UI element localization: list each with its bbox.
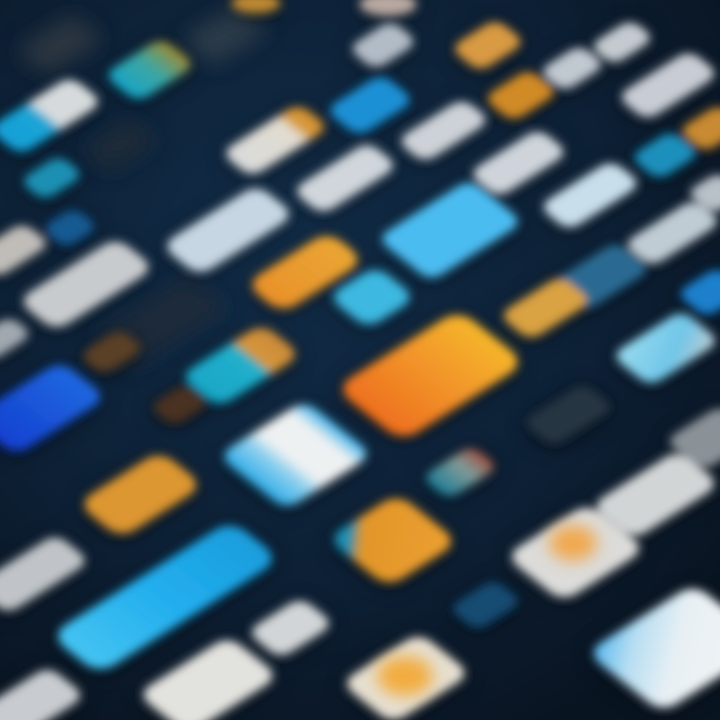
tile: orange upper [246, 232, 364, 312]
tile: cyan and orange [180, 324, 300, 406]
tile: orange small [499, 276, 592, 340]
spot: orange on white tile [549, 525, 597, 561]
tile: white top corner [590, 20, 654, 64]
tile: white with cyan edges [219, 401, 372, 509]
tile: sky and white [587, 584, 720, 712]
tile: white top right [539, 45, 605, 91]
tile: pale cyan bar [539, 160, 641, 230]
tile: white with orange bottom [342, 633, 470, 720]
tile: cyan and white [612, 311, 720, 385]
tile: white bar [397, 99, 490, 162]
tile: large orange [336, 310, 525, 441]
tile: dark gray [522, 383, 615, 447]
tile: white right [617, 50, 719, 120]
spot: orange bottom tile [377, 656, 433, 696]
tile: steel blue [551, 242, 651, 310]
tile: pale blue bar [162, 185, 294, 275]
tile: white lower [247, 598, 333, 658]
tile: multicolour small [422, 446, 498, 498]
tile: orange right edge [678, 104, 720, 152]
soft orange spots [377, 525, 597, 696]
tile: orange second [484, 69, 558, 121]
tile: gray left edge [0, 316, 32, 360]
tile: white bottom [138, 637, 278, 720]
tile: white left [0, 534, 89, 613]
tile: gray right [665, 405, 720, 471]
tile: gray-white bar [624, 199, 720, 266]
tile: orange with cyan [328, 494, 458, 586]
tile: white bar left [18, 238, 154, 330]
tile: teal and yellow [104, 38, 195, 101]
tile: dark teal lower [449, 579, 522, 630]
tile: blue left [41, 208, 98, 248]
tile: white right lower [591, 451, 720, 539]
tile: teal right [630, 131, 700, 179]
tile: cyan and white left [0, 77, 102, 154]
tile: orange top [451, 19, 525, 71]
tile: deep blue [0, 361, 106, 455]
tile: white bar [292, 142, 398, 214]
tile: long blue bar [51, 521, 279, 673]
tile: teal left [20, 156, 83, 200]
tile: white left edge [0, 223, 50, 277]
tile: white bottom left [0, 667, 85, 720]
tile: cyan beside orange [329, 266, 415, 328]
tile: white with orange end [222, 104, 328, 176]
tile: light blue [378, 180, 522, 280]
tile: white top [348, 21, 418, 69]
tile: white bar [469, 129, 568, 197]
tile: brown [79, 329, 144, 374]
tile: white with orange spot [506, 504, 645, 601]
tile: dark brown [149, 384, 210, 426]
tile: white right edge [686, 172, 720, 214]
tile: blue top [326, 74, 414, 136]
tile: pale top edge [360, 0, 416, 15]
tile: orange top edge [232, 0, 280, 12]
dark background tiles [15, 4, 270, 369]
tile: blue right edge [677, 267, 720, 317]
tile: orange lower left [78, 451, 203, 537]
